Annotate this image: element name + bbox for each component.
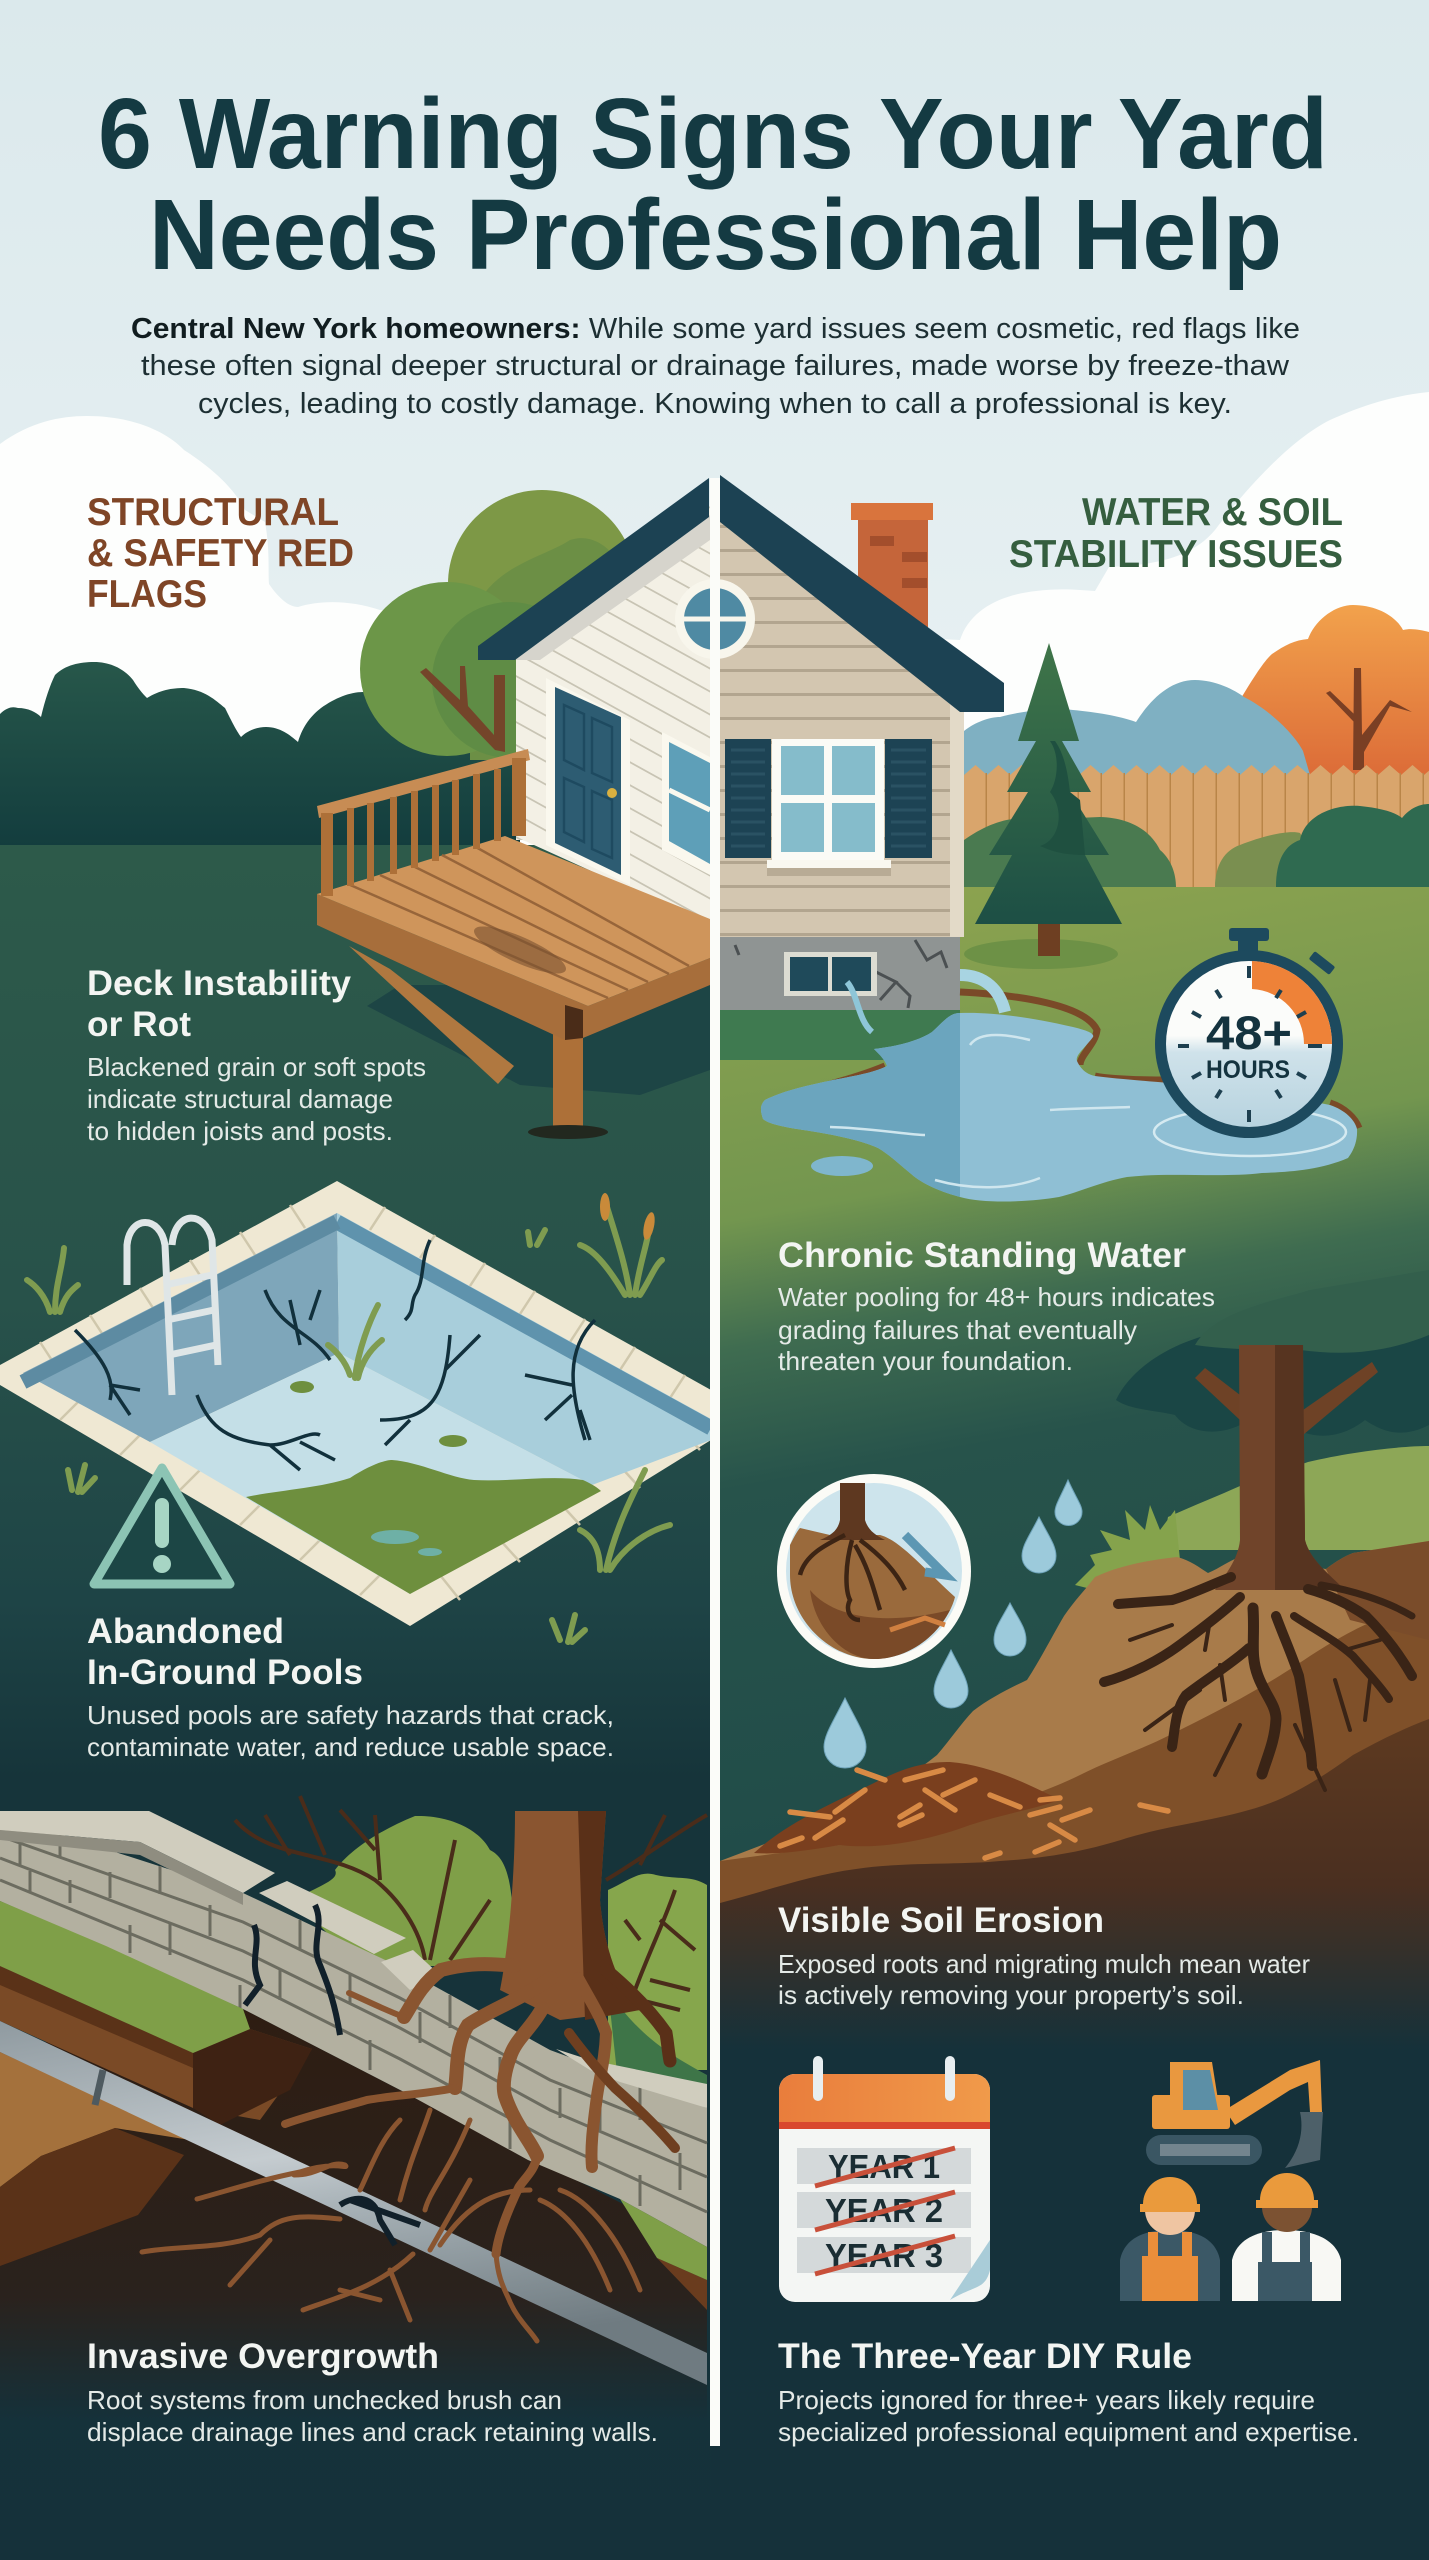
grass strip [0,1901,707,2280]
panel: right yard background [720,887,1429,1947]
water drops [824,1480,1082,1768]
foundation [720,937,960,1010]
inset: root close-up circle [777,1474,971,1668]
tree and invasive roots [142,1811,675,2341]
deck surface [317,836,710,1006]
trench and under-pipe soil [0,1966,707,2420]
deck brace [349,946,514,1084]
mulch pile [754,1762,1168,1858]
grass tufts [27,1200,670,1642]
pine tree [964,643,1122,969]
text block: visible soil erosion [778,1901,1310,2010]
bushes behind fence [964,804,1429,887]
clouds [0,392,1429,900]
text block: three-year DIY rule: The Three-Year DIY Rule [778,2337,1192,2376]
chimney [851,503,933,648]
text block: chronic standing water: grading failures that eventually [778,1315,1137,1345]
pond with water spout [761,975,1359,1202]
text block: abandoned pools: Abandoned [87,1612,284,1651]
heading: structural and safety red flags [87,491,354,616]
pool water line [23,1222,711,1428]
deck [317,749,710,1139]
stopwatch label [1206,1006,1292,1084]
fence [964,765,1429,887]
text block: invasive overgrowth: Invasive Overgrowth [87,2337,439,2376]
text block: chronic standing water: Chronic Standing Water [778,1236,1186,1275]
orange tree [1240,605,1429,775]
heading: structural and safety red flags: & SAFETY RED [87,532,354,575]
calendar years: YEAR 1 [828,2148,940,2185]
deck shadow [367,985,710,1095]
title: 6 Warning Signs Your Yard [98,78,1328,190]
panel: left yard background [0,845,711,2560]
text block: deck instability: or Rot [87,1005,191,1044]
text block: three-year DIY rule [778,2337,1359,2447]
side window [662,732,710,875]
heading: water and soil stability issues [1009,491,1343,576]
text block: chronic standing water: Water pooling for 48+ hours indicates [778,1282,1215,1312]
panel: right lower background [720,1930,1429,2560]
wall cracks [245,1905,340,2035]
round attic window [675,579,755,659]
exposed roots [1104,1577,1412,1790]
text block: three-year DIY rule: Projects ignored for three+ years likely require [778,2385,1315,2415]
cattail heads [600,1193,657,1241]
excavator icon [1146,2060,1323,2168]
erosion tree [720,1270,1429,2050]
heading: water and soil stability issues: STABILITY ISSUES [1009,533,1343,576]
deck railing [317,749,530,896]
hill soil [720,1541,1429,2050]
text block: chronic standing water: threaten your foundation. [778,1346,1073,1376]
wall stones [0,1811,707,2247]
text block: deck instability: Deck Instability [87,964,352,1003]
text block: deck instability: to hidden joists and posts. [87,1116,393,1146]
text block: invasive overgrowth: displace drainage lines and crack retaining walls. [87,2417,658,2447]
house right wall [720,520,964,937]
text block: invasive overgrowth: Root systems from unchecked brush can [87,2385,562,2415]
warning triangle icon [94,1468,230,1584]
hill grass [1160,1446,1429,1560]
text block: abandoned pools [87,1612,614,1762]
worker icons [1120,2173,1341,2301]
retaining wall scene [0,1796,707,2420]
deck post [528,1030,608,1139]
calendar years [825,2148,943,2274]
green sludge [246,1381,601,1594]
intro paragraph: Central New York homeowners: While some yard issues seem cosmetic, red flags like [131,313,1300,345]
text block: three-year DIY rule: specialized professional equipment and expertise. [778,2417,1359,2447]
heading: structural and safety red flags: FLAGS [87,573,207,616]
house [478,475,1004,1060]
intro paragraph: these often signal deeper structural or drainage failures, made worse by freeze-thaw [141,350,1290,382]
stopwatch: 48+ hours [1154,928,1346,1156]
stopwatch label: 48+ [1206,1006,1292,1059]
front window with shutters [725,739,932,876]
calendar years: YEAR 3 [825,2237,943,2274]
intro paragraph: cycles, leading to costly damage. Knowing when to call a professional is key. [198,388,1232,420]
front door [546,678,630,885]
text block: deck instability [87,964,426,1146]
pool back walls [23,1213,339,1442]
distant trees, right [964,605,1429,775]
grass tuft [1075,1505,1180,1590]
center divider [710,478,720,2446]
text block: abandoned pools: Unused pools are safety hazards that crack, [87,1700,614,1730]
strip of lawn below foundation [720,1010,960,1060]
background tree, left [360,490,640,760]
trunk [1195,1345,1378,1590]
text block: visible soil erosion: Visible Soil Erosion [778,1901,1104,1940]
abandoned pool [0,1181,711,1642]
drainage pipe [0,2021,707,2385]
wall caps [0,1811,707,2108]
house left wall [516,506,710,925]
worker 2 [1232,2173,1341,2301]
branches and background bushes [235,1796,707,2100]
text block: visible soil erosion: Exposed roots and migrating mulch mean water [778,1949,1310,1979]
text block: deck instability: Blackened grain or soft spots [87,1052,426,1082]
treeline, left [0,662,520,846]
calendar icon [779,2056,990,2302]
title [98,78,1328,291]
text block: abandoned pools: contaminate water, and reduce usable space. [87,1732,614,1762]
pool ladder [127,1218,218,1395]
cracks [75,1240,595,1470]
worker 1 [1120,2177,1220,2301]
text block: visible soil erosion: is actively removing your property’s soil. [778,1980,1244,2010]
tree foliage [1116,1270,1429,1436]
pool floor [150,1353,592,1594]
title: Needs Professional Help [149,179,1282,291]
calendar years: YEAR 2 [825,2192,943,2229]
heading: water and soil stability issues: WATER & SOIL [1082,491,1343,534]
text block: deck instability: indicate structural damage [87,1084,393,1114]
roof [478,475,1004,712]
intro paragraph [131,313,1300,420]
heading: structural and safety red flags: STRUCTURAL [87,491,339,534]
pool coping [0,1181,711,1626]
stopwatch label: HOURS [1206,1056,1290,1084]
text block: chronic standing water [778,1236,1215,1376]
text block: invasive overgrowth [87,2337,658,2447]
background: sky [0,0,1429,900]
deck fascia [317,894,710,1040]
text block: abandoned pools: In-Ground Pools [87,1653,363,1692]
